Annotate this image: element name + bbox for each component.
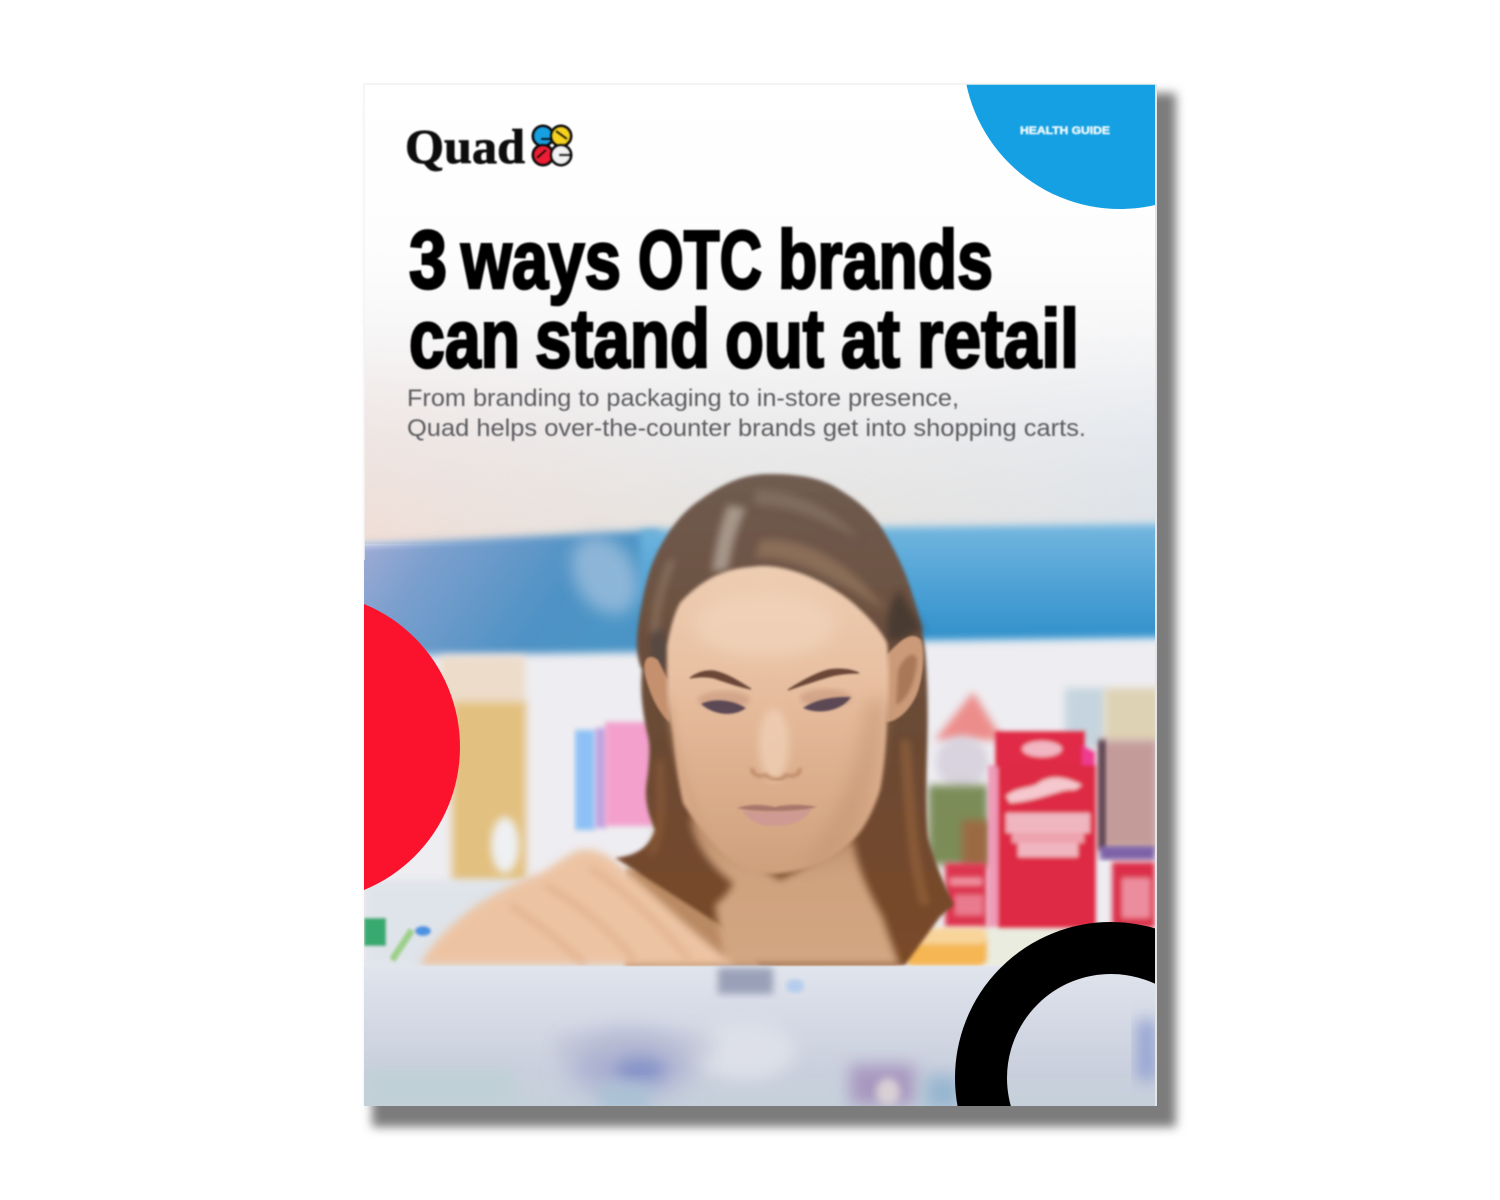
photo: woman looking at shelf	[420, 474, 954, 968]
title: ways	[460, 213, 621, 306]
title: brands	[778, 213, 993, 306]
title: out	[725, 292, 824, 385]
blurred red product box	[988, 731, 1096, 928]
hair back	[615, 474, 954, 965]
page background	[366, 544, 1155, 966]
orange product	[905, 928, 987, 966]
decorative circle: red	[151, 592, 460, 902]
cover page	[364, 84, 1155, 1106]
decorative circle: blue with label	[966, 84, 1155, 209]
left eyebrow	[690, 671, 751, 689]
left shelf items	[440, 656, 525, 706]
logo wordmark: Quad	[405, 119, 525, 174]
title: stand	[535, 292, 710, 385]
eye sockets	[698, 690, 750, 706]
title	[409, 213, 1079, 385]
foreground blurred shelf	[350, 966, 1170, 1116]
neck and chest	[690, 815, 900, 965]
decorative ring: black	[955, 922, 1155, 1106]
lower store backdrop	[350, 640, 1170, 970]
right ear	[886, 636, 923, 722]
photo: blurred store shelves	[350, 524, 1170, 970]
label: health guide: HEALTH GUIDE	[1020, 125, 1110, 137]
infographic: brochure cover	[364, 83, 1184, 1134]
red boxes	[945, 862, 1155, 928]
left ear	[644, 657, 670, 723]
title: 3	[409, 213, 447, 306]
right eyebrow	[788, 669, 859, 690]
logo icon	[533, 126, 571, 165]
hair highlights	[650, 490, 925, 905]
lips	[737, 805, 817, 826]
subtitle	[407, 385, 1086, 442]
left eye	[701, 700, 746, 714]
blue band	[350, 530, 660, 656]
page edge lines	[364, 83, 1155, 85]
right eye	[803, 697, 851, 712]
nose	[759, 709, 789, 781]
title: OTC	[638, 213, 762, 306]
subtitle: Quad helps over-the-counter brands get into shopping carts.	[407, 415, 1086, 442]
logo: Quad	[405, 119, 571, 174]
subtitle: From branding to packaging to in-store presence,	[407, 385, 959, 412]
forehead highlight	[700, 599, 830, 657]
title: at	[841, 292, 900, 385]
face	[667, 566, 889, 874]
right shelf items	[935, 692, 1003, 740]
title: retail	[917, 292, 1079, 385]
upper chest behind hand	[625, 868, 905, 968]
hand reaching	[420, 850, 735, 965]
cheek shade	[830, 699, 891, 837]
page drop shadow	[372, 93, 1176, 1127]
title: can	[409, 292, 520, 385]
